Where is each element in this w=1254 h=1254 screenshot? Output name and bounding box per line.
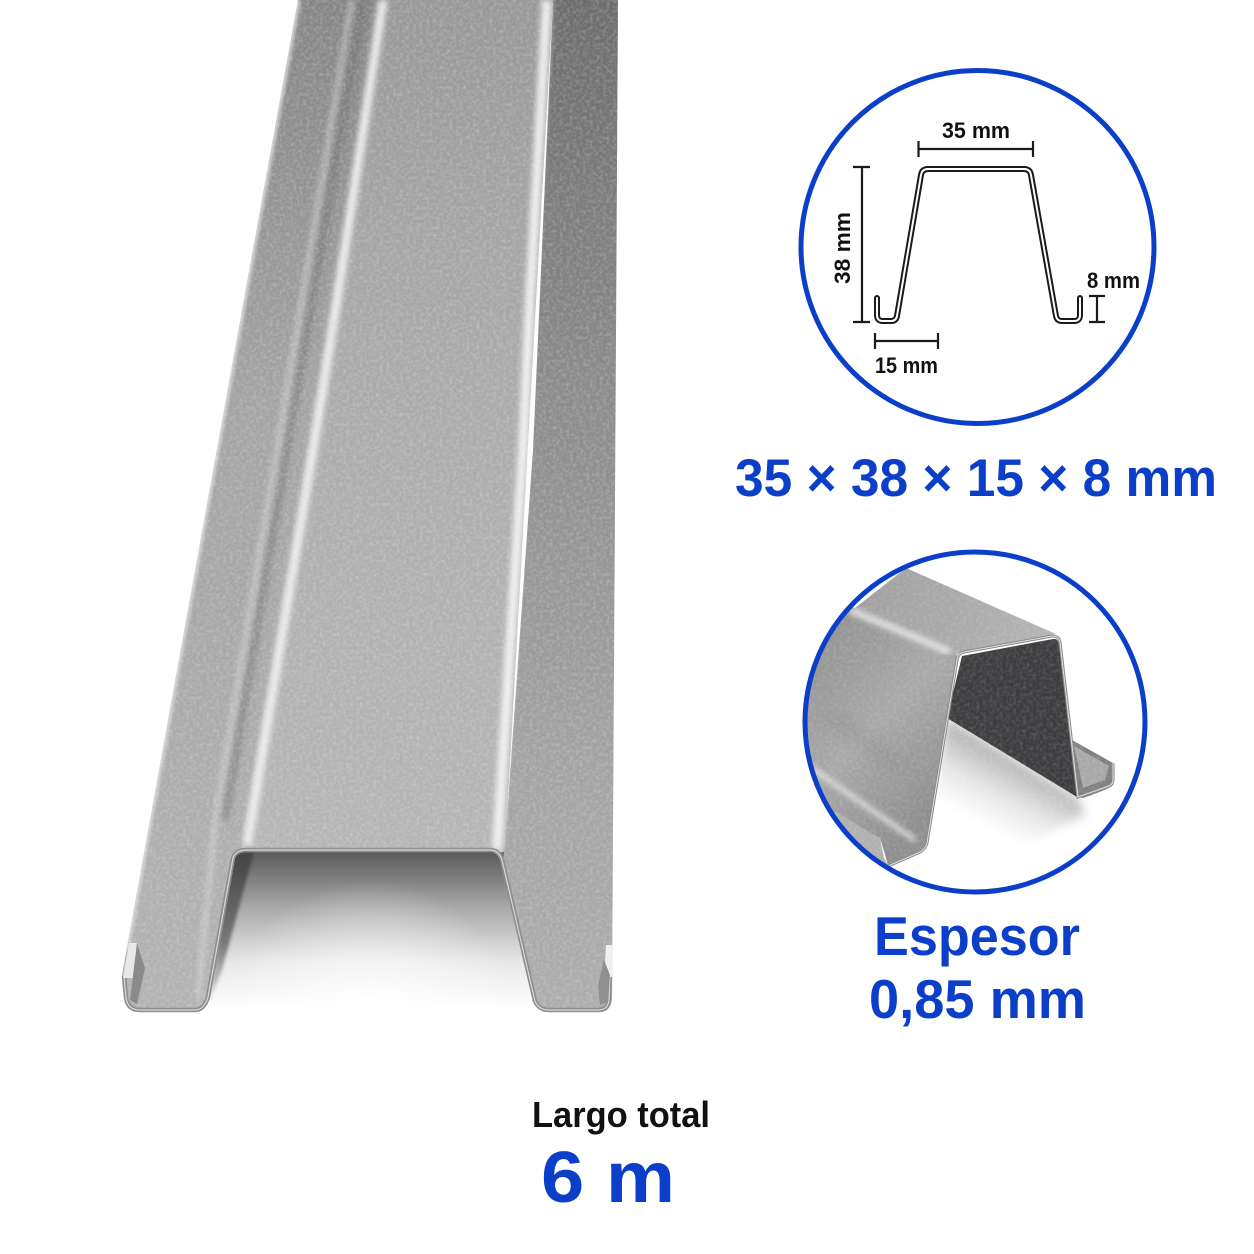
dimension: 15 mm: 15 mm xyxy=(875,353,938,378)
dimension: 8 mm: 8 mm xyxy=(1087,268,1140,293)
panel: cross-section diagram xyxy=(801,70,1154,424)
beam hollow interior shadow xyxy=(208,852,530,1002)
dimension: 15 mm xyxy=(875,333,938,378)
beam left face xyxy=(122,0,385,1012)
panel: thickness close-up xyxy=(790,545,1150,900)
main product: steel profile beam xyxy=(122,0,618,1012)
close-up outer wall xyxy=(808,608,957,864)
close-up cut edge xyxy=(888,636,1113,866)
dimension: 38 mm: 38 mm xyxy=(830,212,855,284)
text: thickness label xyxy=(869,905,1086,1030)
dimension: 35 mm xyxy=(918,118,1033,157)
beam top plate xyxy=(240,0,553,852)
close-up inner wall xyxy=(947,639,1077,797)
circle outline xyxy=(801,70,1154,424)
heading: dimensions: 35 × 38 × 15 × 8 mm xyxy=(735,449,1217,508)
close-up lower flange xyxy=(833,810,888,865)
beam lip highlights xyxy=(123,943,613,1005)
dimension: 35 mm: 35 mm xyxy=(942,118,1010,143)
text: thickness label: Espesor xyxy=(874,905,1080,967)
dimension: 8 mm xyxy=(1087,268,1140,322)
close-up image content xyxy=(808,568,1114,866)
close-up top plate xyxy=(855,568,1056,656)
text: thickness label: 0,85 mm xyxy=(869,968,1086,1030)
text: total length value: 6 m xyxy=(541,1138,675,1218)
dimension: 38 mm xyxy=(830,167,870,322)
text: total length label: Largo total xyxy=(532,1094,710,1135)
profile outline xyxy=(877,169,1080,321)
beam surface highlights and creases xyxy=(0,0,640,1020)
circle outline xyxy=(805,552,1145,892)
beam front cut edge xyxy=(124,850,610,1010)
close-up highlights xyxy=(850,610,950,652)
beam right face xyxy=(503,0,618,1012)
close-up right lip xyxy=(1073,740,1114,798)
close-up floor shadow xyxy=(938,720,1088,836)
